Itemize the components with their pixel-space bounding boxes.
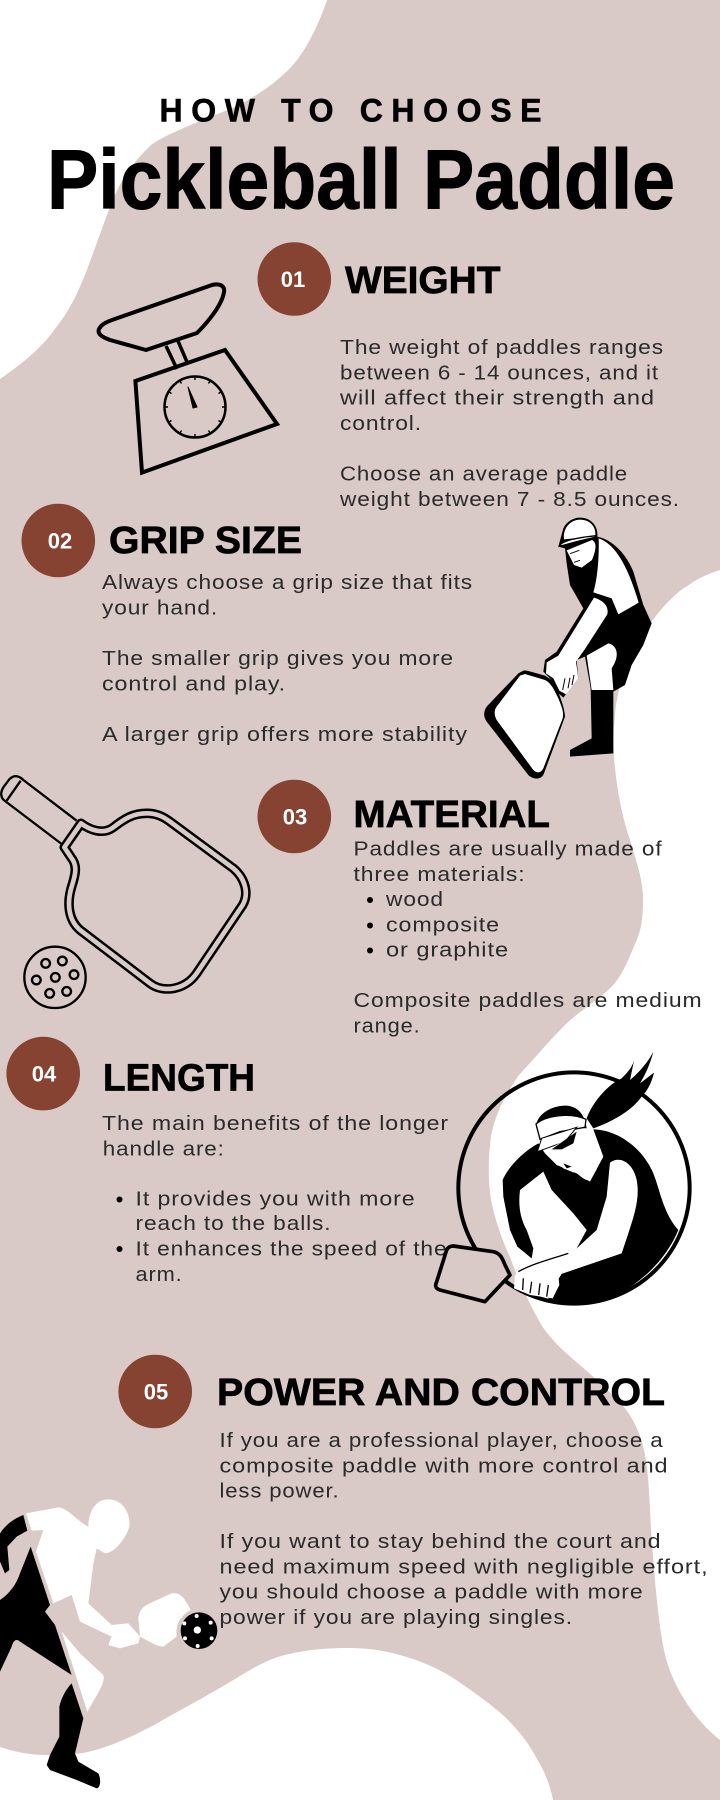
panel: grip size bbox=[22, 504, 652, 779]
text: length bbox=[102, 1112, 449, 1286]
heading: material: MATERIAL bbox=[354, 793, 550, 836]
badge 01: 01 bbox=[281, 267, 305, 292]
title main: Pickleball Paddle bbox=[47, 133, 675, 227]
text: grip size: Always choose a grip size that fits bbox=[102, 571, 473, 594]
text: weight: The weight of paddles ranges bbox=[340, 336, 664, 359]
text: grip size bbox=[102, 571, 473, 746]
text: material: three materials: bbox=[354, 863, 526, 886]
title kicker: HOW TO CHOOSE bbox=[160, 93, 542, 129]
badge 04 bbox=[6, 1037, 80, 1110]
text: grip size: control and play. bbox=[102, 672, 286, 695]
text: weight: between 6 - 14 ounces, and it bbox=[340, 361, 659, 384]
text: power and control: you should choose a paddle with more bbox=[220, 1581, 644, 1604]
icon: ball bbox=[181, 1612, 217, 1649]
badge 03 bbox=[258, 780, 331, 853]
panel: length bbox=[6, 1037, 690, 1305]
text: length: handle are: bbox=[103, 1137, 225, 1160]
heading: weight: WEIGHT bbox=[345, 259, 501, 302]
text: material: or graphite bbox=[386, 939, 509, 962]
text: weight: weight between 7 - 8.5 ounces. bbox=[339, 488, 680, 511]
text: grip size: A larger grip offers more stability bbox=[102, 723, 468, 746]
text: weight bbox=[339, 336, 680, 511]
badge 02 bbox=[22, 504, 95, 577]
badge 01 bbox=[258, 242, 331, 316]
text: weight: control. bbox=[340, 412, 422, 435]
text: length: The main benefits of the longer bbox=[102, 1112, 449, 1135]
text: material: Paddles are usually made of bbox=[354, 838, 662, 861]
text: power and control: power if you are playing singles. bbox=[220, 1606, 573, 1629]
text: grip size: The smaller grip gives you more bbox=[102, 647, 454, 670]
panel: weight bbox=[99, 242, 680, 511]
icon: paddle and ball outline bbox=[1, 776, 246, 1008]
heading: length: LENGTH bbox=[103, 1057, 255, 1100]
badge 02: 02 bbox=[48, 528, 72, 554]
text: grip size: your hand. bbox=[102, 596, 218, 620]
text: length: It enhances the speed of the bbox=[136, 1238, 448, 1260]
badge 03: 03 bbox=[283, 804, 307, 830]
text: material: composite bbox=[386, 913, 500, 936]
badge 05 bbox=[118, 1355, 192, 1428]
icon: kitchen scale bbox=[99, 284, 277, 473]
icon: player in circle bbox=[436, 1052, 690, 1305]
text: length: arm. bbox=[136, 1263, 182, 1286]
title bbox=[47, 93, 675, 227]
text: material: range. bbox=[354, 1014, 420, 1037]
text: power and control bbox=[220, 1429, 708, 1629]
text: material: Composite paddles are medium bbox=[354, 989, 702, 1012]
text: material: wood bbox=[385, 888, 444, 911]
text: power and control: If you want to stay behind the court and bbox=[220, 1530, 662, 1553]
icon: player with paddle bbox=[484, 518, 652, 779]
heading: grip size: GRIP SIZE bbox=[109, 519, 302, 562]
text: length: It provides you with more bbox=[136, 1188, 416, 1210]
badge 04: 04 bbox=[32, 1062, 57, 1087]
text: power and control: need maximum speed with negligible effort, bbox=[220, 1555, 708, 1578]
badge 05: 05 bbox=[144, 1380, 168, 1404]
text: power and control: If you are a professional player, choose a bbox=[220, 1429, 664, 1452]
text: power and control: less power. bbox=[220, 1480, 340, 1503]
text: power and control: composite paddle with more control and bbox=[220, 1454, 668, 1477]
panel: power and control bbox=[0, 1355, 708, 1788]
text: weight: will affect their strength and bbox=[339, 387, 655, 410]
icon: player silhouette with ball bbox=[0, 1499, 217, 1788]
heading: power and control: POWER AND CONTROL bbox=[217, 1371, 665, 1414]
text: weight: Choose an average paddle bbox=[340, 463, 628, 486]
text: length: reach to the balls. bbox=[136, 1212, 332, 1235]
text: material bbox=[354, 838, 702, 1037]
panel: material bbox=[1, 776, 703, 1037]
